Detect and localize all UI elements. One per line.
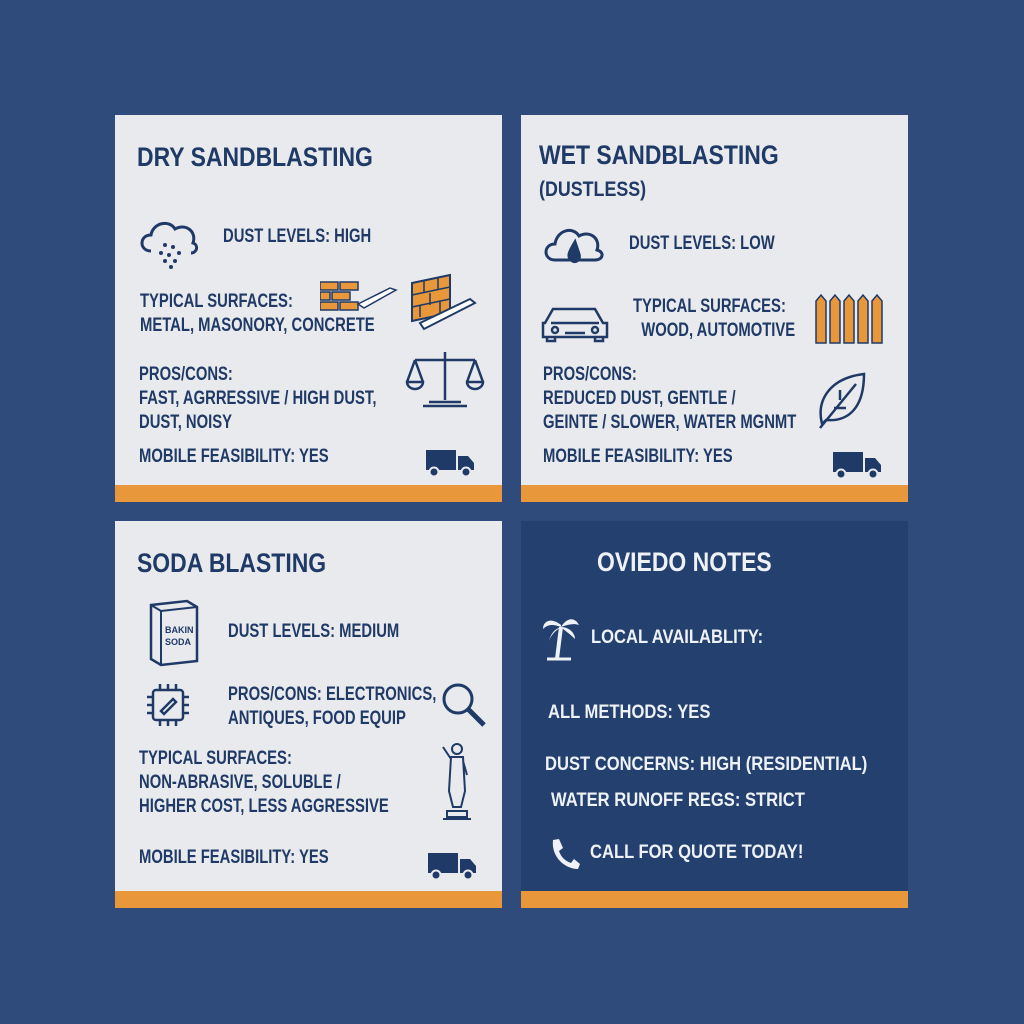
text: typical surfaces: WOOD, AUTOMOTIVE bbox=[641, 320, 795, 341]
text: water runoff: WATER RUNOFF REGS: STRICT bbox=[551, 789, 805, 811]
text: all methods: ALL METHODS: YES bbox=[548, 701, 710, 723]
text: dust concerns: DUST CONCERNS: HIGH (RESIDENTIAL) bbox=[545, 753, 867, 775]
text: dust levels: DUST LEVELS: HIGH bbox=[223, 226, 371, 247]
icon: leaf bbox=[819, 372, 866, 429]
icon: brick wall bbox=[411, 274, 477, 330]
text: pros/cons: REDUCED DUST, GENTLE / bbox=[543, 388, 736, 409]
text: pros/cons bbox=[139, 364, 376, 433]
text: typical surfaces: TYPICAL SURFACES: bbox=[140, 291, 293, 312]
icon: truck bbox=[833, 452, 881, 478]
text: pros/cons bbox=[543, 364, 796, 433]
heading: oviedo: OVIEDO NOTES bbox=[597, 547, 772, 577]
text: pros/cons: PROS/CONS: bbox=[543, 364, 637, 385]
text: pros/cons: PROS/CONS: bbox=[139, 364, 233, 385]
text: call for quote: CALL FOR QUOTE TODAY! bbox=[590, 841, 803, 863]
text: pros/cons: ANTIQUES, FOOD EQUIP bbox=[228, 708, 406, 729]
text: pros/cons: GEINTE / SLOWER, WATER MGNMT bbox=[543, 412, 796, 433]
icon: chip bbox=[147, 684, 189, 726]
text: mobile: MOBILE FEASIBILITY: YES bbox=[543, 446, 733, 467]
heading: wet: (DUSTLESS) bbox=[539, 178, 646, 201]
icon: bricks bbox=[320, 281, 398, 311]
icon: dust cloud bbox=[140, 222, 198, 269]
text: pros/cons: PROS/CONS: ELECTRONICS, bbox=[228, 684, 436, 705]
heading: wet bbox=[539, 140, 779, 201]
heading: soda: SODA BLASTING bbox=[137, 548, 326, 578]
icon: truck bbox=[426, 450, 474, 476]
panel: wet sandblasting bbox=[521, 115, 908, 502]
text: pros/cons: FAST, AGRRESSIVE / HIGH DUST, bbox=[139, 388, 376, 409]
text: typical surfaces: HIGHER COST, LESS AGGRESSIVE bbox=[139, 796, 389, 817]
icon: baking soda box: SODA bbox=[165, 637, 192, 647]
text: dust levels: DUST LEVELS: LOW bbox=[629, 233, 775, 254]
icon: baking soda box: BAKIN bbox=[165, 625, 194, 635]
text: dust levels: DUST LEVELS: MEDIUM bbox=[228, 621, 399, 642]
text: typical surfaces bbox=[633, 296, 795, 341]
text: local availability: LOCAL AVAILABLITY: bbox=[591, 626, 763, 648]
text: typical surfaces: NON-ABRASIVE, SOLUBLE / bbox=[139, 772, 341, 793]
text: pros/cons: DUST, NOISY bbox=[139, 412, 232, 433]
icon: phone bbox=[552, 839, 580, 869]
icon: statue bbox=[442, 743, 471, 820]
icon: palm tree bbox=[543, 619, 579, 660]
text: typical surfaces bbox=[140, 291, 375, 336]
icon: fence bbox=[815, 294, 883, 344]
icon: scales bbox=[406, 352, 484, 408]
text: typical surfaces: METAL, MASONORY, CONCRETE bbox=[140, 315, 375, 336]
panel: soda blasting bbox=[115, 521, 502, 908]
icon: magnifier bbox=[442, 684, 486, 727]
text: typical surfaces: TYPICAL SURFACES: bbox=[139, 748, 292, 769]
icon: truck bbox=[428, 853, 476, 878]
text: typical surfaces: TYPICAL SURFACES: bbox=[633, 296, 786, 317]
text: typical surfaces bbox=[139, 748, 389, 817]
heading: wet: WET SANDBLASTING bbox=[539, 140, 779, 170]
panel: dry sandblasting bbox=[115, 115, 502, 502]
icon: baking soda box bbox=[150, 600, 198, 666]
text: mobile: MOBILE FEASIBILITY: YES bbox=[139, 847, 329, 868]
panel: oviedo notes bbox=[521, 521, 908, 908]
icon: car bbox=[542, 308, 608, 342]
icon: cloud drop bbox=[544, 228, 604, 264]
text: pros/cons bbox=[228, 684, 436, 729]
heading: dry: DRY SANDBLASTING bbox=[137, 142, 373, 172]
text: mobile: MOBILE FEASIBILITY: YES bbox=[139, 446, 329, 467]
